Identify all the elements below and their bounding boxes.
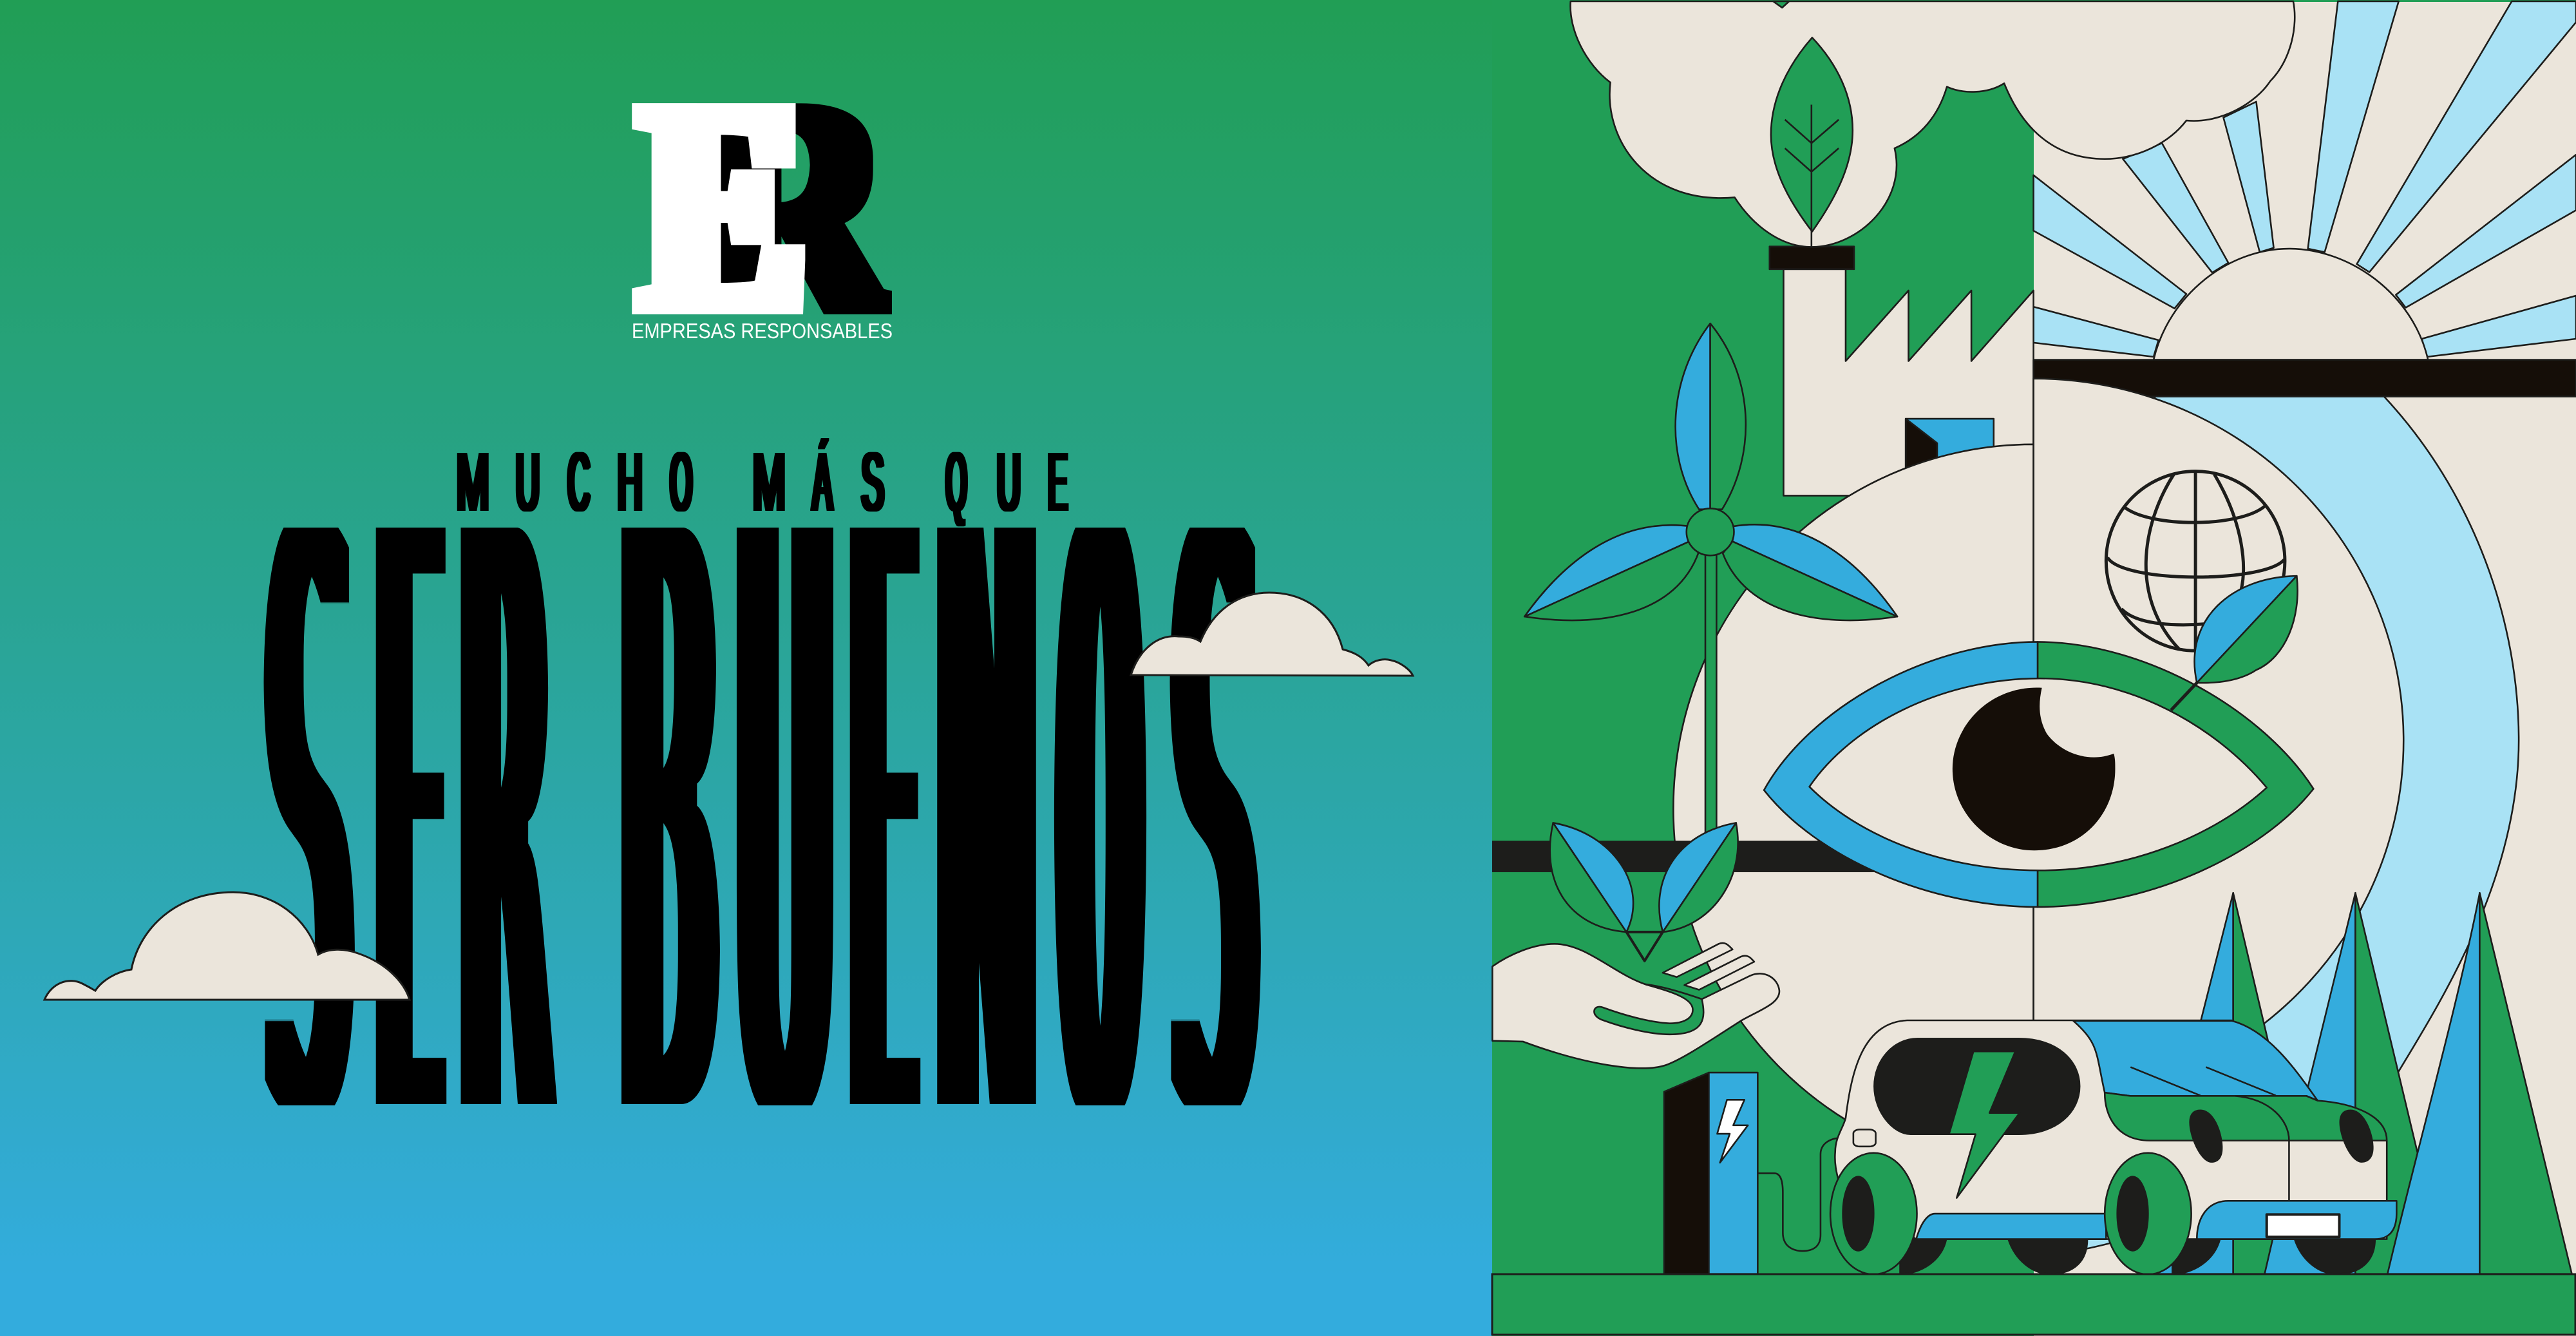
black horizon band xyxy=(2034,359,2576,397)
wheels xyxy=(1830,1153,2192,1274)
river xyxy=(2081,397,2519,1250)
sun rays xyxy=(2034,1,2576,357)
cloud: top smoke with leaf xyxy=(1571,1,2295,247)
headline: ser buenos: N xyxy=(940,352,1033,1310)
hand holding sprout xyxy=(1492,823,1779,1068)
car body xyxy=(1835,1020,2387,1239)
subtitle: mucho más que: U xyxy=(516,436,540,528)
headline: ser buenos: B xyxy=(623,352,714,1310)
headline: ser buenos xyxy=(264,528,1261,1105)
hood xyxy=(2105,1093,2387,1141)
headline: ser buenos: U xyxy=(739,352,831,1310)
side window xyxy=(1874,1038,2079,1134)
headline: ser buenos: S xyxy=(268,352,350,1310)
subtitle: mucho más que: O xyxy=(670,436,692,528)
leaf on globe xyxy=(2171,576,2298,710)
fingers xyxy=(1663,943,1754,990)
headline: ser buenos: E xyxy=(380,352,439,1310)
electric car xyxy=(1830,1020,2396,1274)
pupil xyxy=(1953,687,2115,850)
left black band xyxy=(1492,841,1879,872)
subtitle: mucho más que: Á xyxy=(813,436,832,528)
license plate xyxy=(2267,1214,2339,1237)
illustration: sun, rays and sky xyxy=(2034,1,2576,1250)
ground xyxy=(1492,1274,2575,1335)
subtitle: mucho más que xyxy=(457,436,1067,528)
logo: ER Empresas Responsables xyxy=(632,36,893,376)
sprout leaves xyxy=(1550,823,1738,932)
text: E xyxy=(1048,436,1067,528)
leaf xyxy=(1771,37,1853,247)
factory xyxy=(1770,247,2034,495)
charging station xyxy=(1664,1073,1853,1274)
logo letter E: E xyxy=(645,41,800,372)
icon: globe xyxy=(2106,472,2285,651)
logo letter R: R xyxy=(705,36,891,376)
cable xyxy=(1757,1138,1853,1251)
hand palm xyxy=(1492,944,1779,1068)
icon: green lightning bolt xyxy=(1949,1051,2020,1198)
chimney cap xyxy=(1770,247,1854,269)
factory window xyxy=(1906,419,1994,472)
cloud: upper right xyxy=(1131,593,1413,676)
headlights xyxy=(2189,1109,2374,1163)
trees xyxy=(2145,893,2572,1274)
subtitle: mucho más que: M xyxy=(753,436,786,528)
rear tires xyxy=(1900,1239,2375,1274)
logo caption: EMPRESAS RESPONSABLES xyxy=(632,319,893,343)
wind turbine xyxy=(1524,323,1897,842)
text: S xyxy=(1174,352,1256,1310)
hill: big circle halves xyxy=(1673,359,2403,1173)
subtitle: mucho más que: H xyxy=(618,436,643,528)
panel: illustration background xyxy=(1492,0,2576,1336)
cloud: lower left xyxy=(44,892,410,1000)
subtitle: mucho más que: Q xyxy=(946,436,967,528)
eye xyxy=(1764,642,2313,907)
subtitle: mucho más que: U xyxy=(997,436,1021,528)
headline: ser buenos: E xyxy=(854,352,913,1310)
sprout stem xyxy=(1627,932,1663,961)
headline: ser buenos: O xyxy=(1060,352,1141,1310)
windshield xyxy=(2073,1021,2318,1101)
sun dome xyxy=(2154,249,2428,359)
charge port xyxy=(1853,1129,1876,1147)
icon: white bolt xyxy=(1717,1100,1748,1163)
subtitle: mucho más que: C xyxy=(568,436,590,528)
subtitle: mucho más que: S xyxy=(862,436,884,528)
thumb xyxy=(1594,984,1703,1035)
bumpers xyxy=(1916,1201,2396,1239)
subtitle: mucho más que: M xyxy=(457,436,489,528)
headline: ser buenos: R xyxy=(465,352,547,1310)
